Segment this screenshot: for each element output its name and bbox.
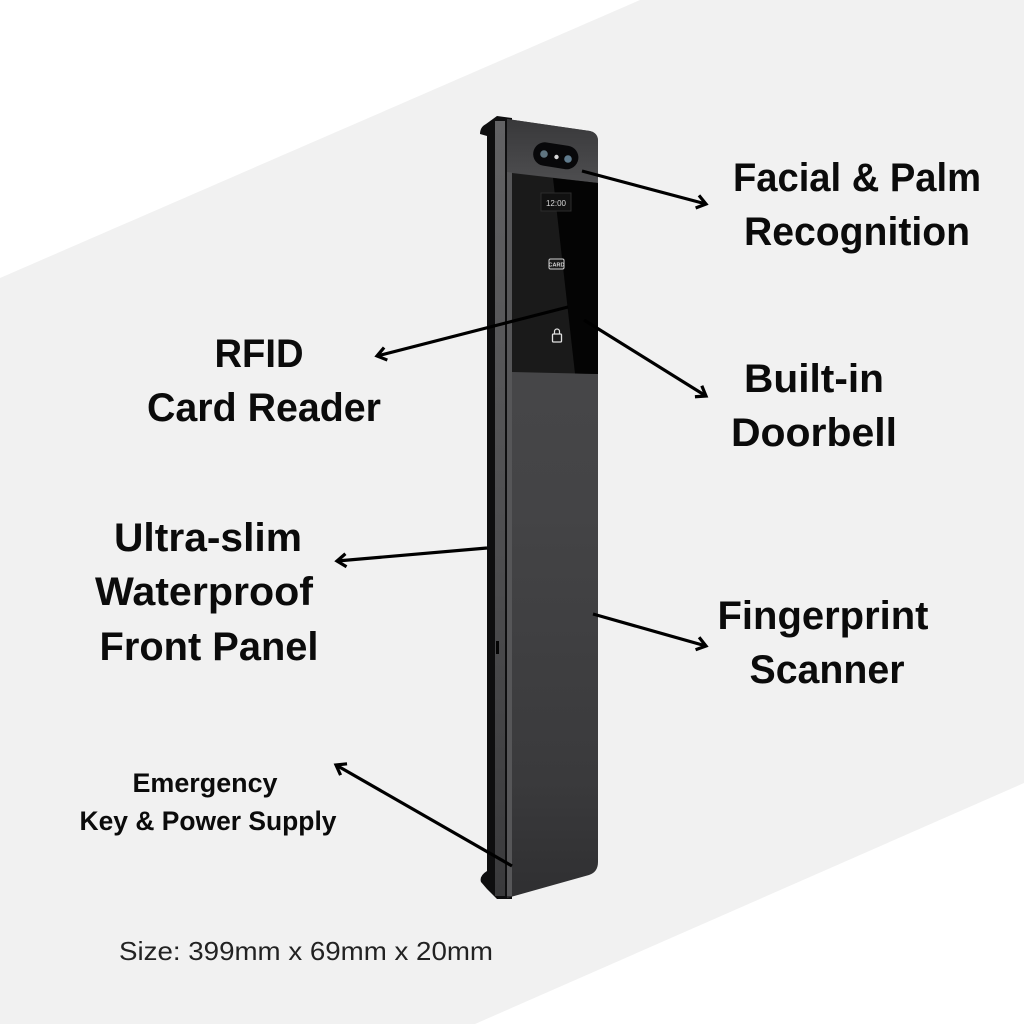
label: fingerprint scanner: Fingerprint (718, 594, 928, 638)
label: emergency key and power supply: Key & Power Supply (80, 806, 336, 836)
screen reflection (553, 178, 598, 374)
card icon: CARD (549, 262, 564, 268)
label: ultra-slim waterproof front panel: Front Panel (100, 625, 318, 669)
arrow: ultra-slim front panel (337, 548, 487, 561)
label: ultra-slim waterproof front panel: Waterproof (95, 570, 314, 614)
arrow: built-in doorbell (584, 320, 706, 396)
arrow: emergency key and power supply (336, 765, 512, 866)
lock side highlight (495, 121, 505, 896)
light (554, 155, 559, 159)
size note: Size: 399mm x 69mm x 20mm (119, 936, 493, 966)
label: RFID card reader: RFID (214, 332, 304, 376)
front edge highlight (507, 172, 512, 896)
label: fingerprint scanner: Scanner (750, 648, 904, 692)
label: built-in doorbell: Built-in (744, 357, 884, 401)
lens right (564, 155, 572, 163)
label: facial and palm recognition: Recognition (744, 210, 970, 254)
label: facial and palm recognition: Facial & Palm (733, 156, 981, 200)
label: emergency key and power supply: Emergency (132, 768, 278, 798)
label: RFID card reader: Card Reader (147, 386, 381, 430)
product: smart door lock (480, 116, 598, 899)
clock display: 12:00 (546, 199, 567, 208)
clock display (541, 193, 571, 211)
camera head (507, 119, 598, 183)
arrow: RFID card reader (377, 307, 568, 356)
card icon (549, 259, 564, 269)
label: ultra-slim waterproof front panel: Ultra-slim (114, 516, 302, 560)
arrow: fingerprint scanner (593, 614, 706, 646)
lock front panel (507, 119, 598, 898)
lock side rail (480, 116, 512, 899)
label: built-in doorbell: Doorbell (731, 411, 897, 455)
camera module (531, 141, 580, 171)
arrow: facial and palm recognition (582, 171, 706, 204)
lens left (540, 150, 548, 158)
side slot (496, 641, 499, 654)
lock icon (552, 329, 562, 342)
touch screen (512, 173, 598, 374)
